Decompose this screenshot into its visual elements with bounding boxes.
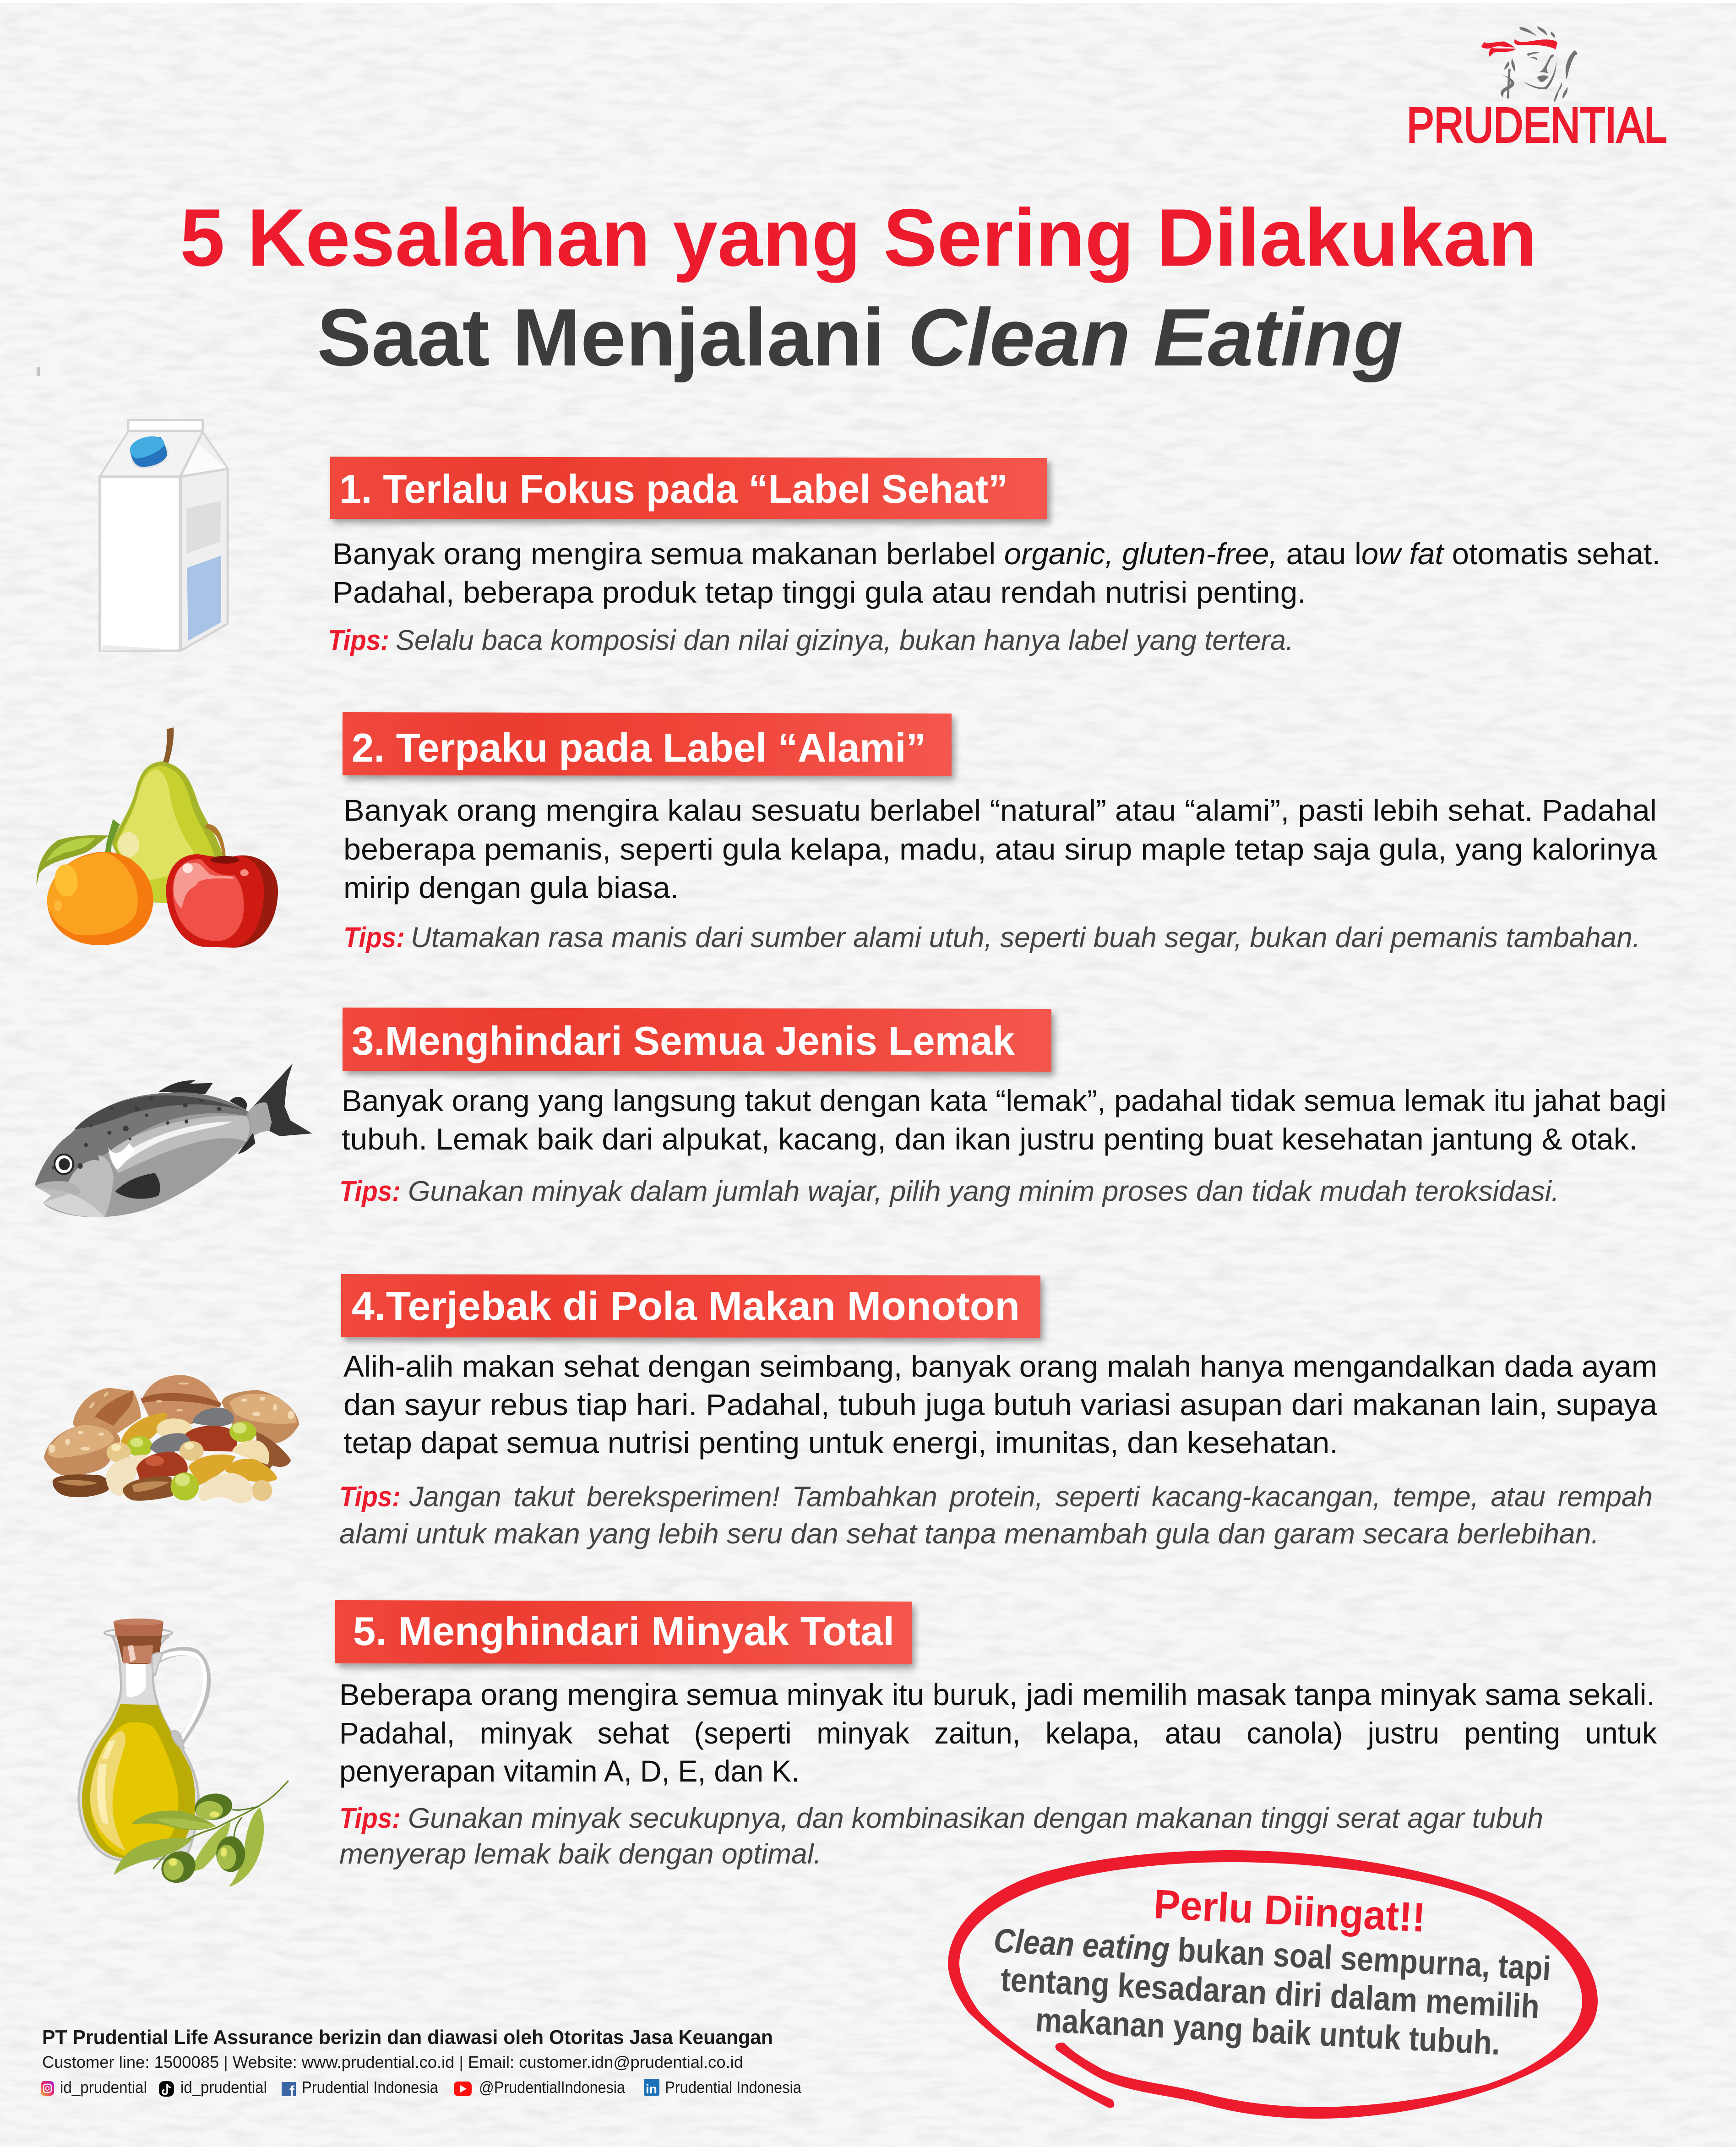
- social: linkedin: Prudential Indonesia: [665, 2078, 802, 2097]
- tips 4: Tips:: [339, 1481, 401, 1513]
- heading banner 4: [341, 1274, 1040, 1338]
- olive branch: [114, 1781, 288, 1887]
- social: instagram: id_prudential: [60, 2078, 147, 2097]
- social: facebook: Prudential Indonesia: [302, 2078, 439, 2097]
- body text 1: [332, 537, 1660, 609]
- body text 2: beberapa pemanis, seperti gula kelapa, madu, atau sirup maple tetap saja gula, yang kalorinya: [343, 832, 1657, 866]
- tips 5: [339, 1803, 1543, 1870]
- tips 5: Gunakan minyak secukupnya, dan kombinasikan dengan makanan tinggi serat agar tubuh: [408, 1803, 1543, 1834]
- callout body: tentang kesadaran diri dalam memilih: [1000, 1960, 1540, 2026]
- body text 1: Banyak orang mengira semua makanan berlabel organic, gluten-free, atau low fat otomatis sehat.: [332, 537, 1660, 571]
- social: facebook: f: [289, 2083, 294, 2099]
- social: tiktok: id_prudential: [180, 2078, 267, 2097]
- body text 4: dan sayur rebus tiap hari. Padahal, tubuh juga butuh variasi asupan dari makanan lain, supaya: [343, 1388, 1657, 1422]
- contact line: Customer line: 1500085 | Website: www.prudential.co.id | Email: customer.idn@prudential.co.id: [42, 2053, 743, 2071]
- body text 2: [343, 793, 1657, 905]
- heading banner 4: 4.Terjebak di Pola Makan Monoton: [352, 1283, 1020, 1329]
- body text 5: [339, 1678, 1657, 1788]
- icon: fish: [35, 1063, 312, 1217]
- callout: Perlu Diingat: [948, 1850, 1598, 2119]
- logo: Prudential: [1407, 26, 1667, 153]
- body text 5: Beberapa orang mengira semua minyak itu buruk, jadi memilih masak tanpa minyak sama sekali.: [339, 1678, 1655, 1711]
- body text 5: Padahal, minyak sehat (seperti minyak zaitun, kelapa, atau canola) justru penting untuk: [339, 1716, 1657, 1750]
- social: youtube: @PrudentialIndonesia: [479, 2078, 626, 2097]
- heading banner 1: 1. Terlalu Fokus pada “Label Sehat”: [339, 466, 1008, 512]
- tips 3: Gunakan minyak dalam jumlah wajar, pilih yang minim proses dan tidak mudah teroksidasi.: [408, 1176, 1559, 1207]
- body text 4: Alih-alih makan sehat dengan seimbang, banyak orang malah hanya mengandalkan dada ayam: [343, 1349, 1657, 1383]
- tips 4: alami untuk makan yang lebih seru dan sehat tanpa menambah gula dan garam secara berlebihan.: [339, 1518, 1599, 1550]
- section 3: [339, 1008, 1666, 1207]
- social: linkedin: in: [646, 2082, 657, 2096]
- body text 1: Padahal, beberapa produk tetap tinggi gula atau rendah nutrisi penting.: [332, 575, 1306, 609]
- body text 3: tubuh. Lemak baik dari alpukat, kacang, dan ikan justru penting buat kesehatan jantung & otak.: [342, 1122, 1638, 1156]
- section 1: [328, 457, 1660, 656]
- title: [180, 192, 1537, 383]
- body text 3: [342, 1084, 1666, 1156]
- callout body: makanan yang baik untuk tubuh.: [1034, 2000, 1501, 2062]
- tips 2: Tips:: [343, 922, 405, 954]
- body text 4: tetap dapat semua nutrisi penting untuk energi, imunitas, dan kesehatan.: [343, 1426, 1338, 1460]
- heading banner 5: 5. Menghindari Minyak Total: [353, 1608, 894, 1654]
- tips 5: menyerap lemak baik dengan optimal.: [339, 1838, 822, 1870]
- tips 1: Tips:: [328, 625, 389, 656]
- title: Saat Menjalani Clean Eating: [317, 292, 1403, 383]
- tips 4: Jangan takut bereksperimen! Tambahkan protein, seperti kacang-kacangan, tempe, atau rempah: [409, 1481, 1653, 1513]
- section 4: [339, 1274, 1657, 1550]
- heading banner 3: 3.Menghindari Semua Jenis Lemak: [352, 1018, 1015, 1063]
- callout body: Clean eating bukan soal sempurna, tapi: [993, 1921, 1552, 1988]
- footer: [41, 2026, 802, 2099]
- icon: nuts: [44, 1375, 299, 1503]
- icon: Prudence head: [1481, 26, 1578, 103]
- icon: olive oil jug: [79, 1618, 288, 1887]
- tips 2: Utamakan rasa manis dari sumber alami utuh, seperti buah segar, bukan dari pemanis tambahan.: [411, 922, 1640, 954]
- body text 3: Banyak orang yang langsung takut dengan kata “lemak”, padahal tidak semua lemak itu jahat bagi: [342, 1084, 1666, 1117]
- body text 2: mirip dengan gula biasa.: [343, 871, 679, 905]
- section 5: [335, 1600, 1657, 1870]
- heading banner 2: 2. Terpaku pada Label “Alami”: [352, 725, 926, 770]
- section 2: [343, 712, 1657, 954]
- heading banner 3: [343, 1008, 1051, 1072]
- logo: Prudential: PRUDENTIAL: [1407, 97, 1667, 153]
- body text 2: Banyak orang mengira kalau sesuatu berlabel “natural” atau “alami”, pasti lebih sehat. Padahal: [343, 793, 1657, 827]
- icon: fruits: [37, 727, 278, 948]
- hand-drawn red ring: [948, 1850, 1598, 2119]
- heading banner 1: [330, 457, 1047, 519]
- title: 5 Kesalahan yang Sering Dilakukan: [180, 192, 1537, 283]
- body text 4: [343, 1349, 1657, 1460]
- company statement: PT Prudential Life Assurance berizin dan diawasi oleh Otoritas Jasa Keuangan: [42, 2026, 773, 2049]
- tips 5: Tips:: [339, 1803, 401, 1834]
- icon: milk carton: [100, 420, 228, 651]
- tips 4: [339, 1481, 1653, 1550]
- callout body: [993, 1921, 1552, 2062]
- heading banner 2: [343, 712, 952, 776]
- body text 5: penyerapan vitamin A, D, E, dan K.: [339, 1754, 800, 1788]
- heading banner 5: [335, 1600, 912, 1664]
- tips 1: Selalu baca komposisi dan nilai gizinya, bukan hanya label yang tertera.: [396, 625, 1294, 656]
- tips 3: Tips:: [339, 1176, 401, 1207]
- callout heading: Perlu Diingat!!: [1153, 1881, 1426, 1941]
